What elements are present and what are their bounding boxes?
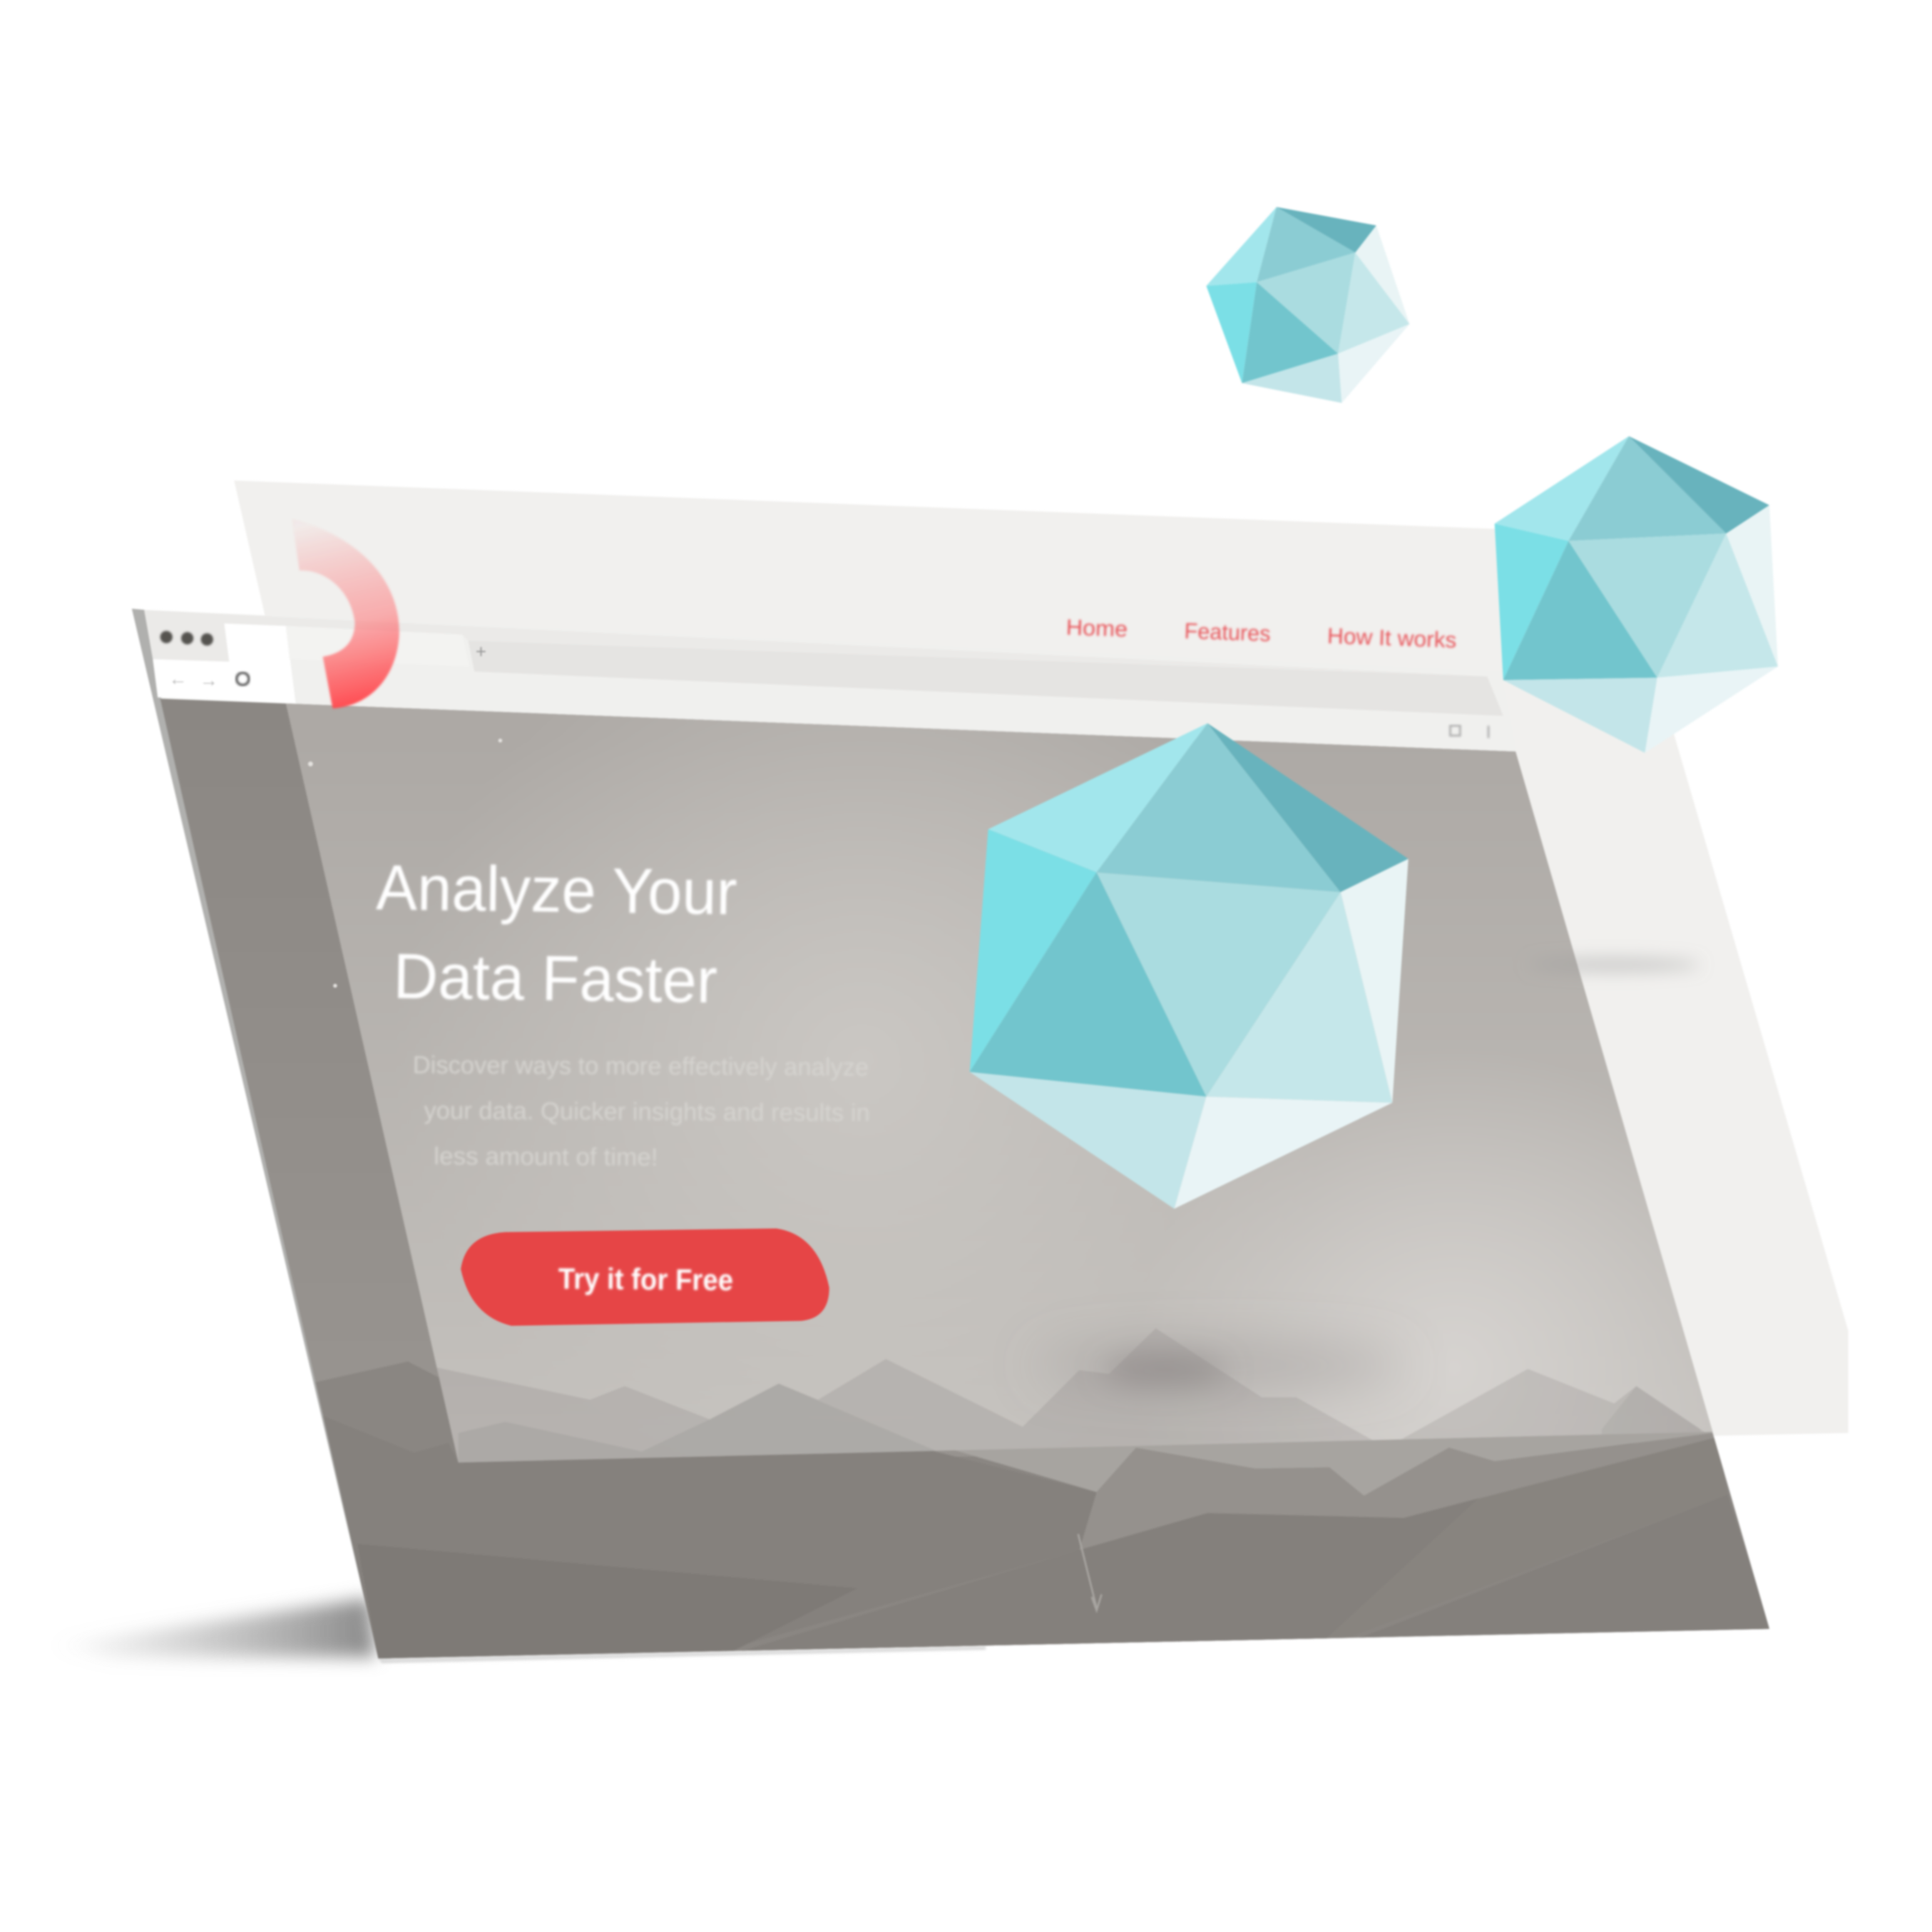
- mountains: [438, 1328, 1702, 1463]
- front browser window: [132, 608, 1774, 1658]
- new tab plus: +: [476, 643, 486, 663]
- body text: [413, 1052, 870, 1171]
- right small peak: [1603, 1395, 1685, 1433]
- call to action button: [461, 1228, 829, 1326]
- icosahedron: small: [1206, 207, 1409, 403]
- back arrow: ←: [169, 670, 188, 690]
- back panel: [234, 481, 1849, 1463]
- body text: Discover ways to more effectively analyze: [413, 1052, 869, 1081]
- nav: how it works: How It works: [1327, 623, 1457, 653]
- mid layer: [1083, 1443, 1689, 1548]
- foreground wedge right: [1375, 1629, 1763, 1637]
- body text: your data. Quicker insights and results in: [424, 1098, 870, 1127]
- reload icon: [237, 673, 249, 685]
- icosahedron: medium: [1495, 436, 1778, 753]
- body text: less amount of time!: [434, 1143, 658, 1171]
- button label: Try it for Free: [558, 1262, 733, 1297]
- dark strip mountain: [315, 1361, 1769, 1658]
- forward arrow: →: [200, 670, 218, 690]
- illustration: floating browser mockup: [95, 205, 1849, 1669]
- active tab, left part: [153, 623, 296, 704]
- window edge: [132, 608, 391, 1658]
- near ridge: [459, 1385, 930, 1462]
- shadow under bottom edge: [378, 1646, 986, 1663]
- soft cloud shadow wide: [1035, 1346, 1405, 1385]
- navigation: [1065, 615, 1457, 653]
- soft cloud shadow centre: [1103, 1358, 1226, 1382]
- page lit area: [286, 704, 1712, 1463]
- soft shadow on panel: [1528, 959, 1700, 971]
- light ridge beyond panel edge: [959, 1432, 1710, 1496]
- foreground dark left: [403, 1645, 742, 1657]
- icosahedron: large: [970, 723, 1409, 1209]
- stars: [308, 739, 502, 988]
- ground shadow: [49, 1598, 376, 1657]
- nav: home: Home: [1065, 615, 1128, 642]
- page dark area: [160, 699, 1769, 1658]
- window dots: [160, 631, 213, 645]
- lower page mountain layers: [315, 1361, 1774, 1658]
- headline: Data Faster: [393, 941, 718, 1017]
- active tab, right part: [286, 626, 469, 667]
- headline: [376, 852, 737, 1017]
- far ridge: [438, 1329, 1702, 1462]
- toolbar icons: [1450, 726, 1488, 738]
- headline: Analyze Your: [376, 852, 737, 929]
- chrome top band: [144, 610, 1487, 676]
- logo arc: [292, 518, 399, 708]
- lower right layer: [1463, 1438, 1727, 1513]
- browser chrome: [144, 610, 1517, 753]
- foreground centre: [721, 1498, 1478, 1657]
- nav: features: Features: [1184, 618, 1271, 646]
- scroll arrow: [1078, 1534, 1102, 1610]
- dark lower ridge left: [468, 1451, 953, 1466]
- tab strip: [469, 640, 1503, 716]
